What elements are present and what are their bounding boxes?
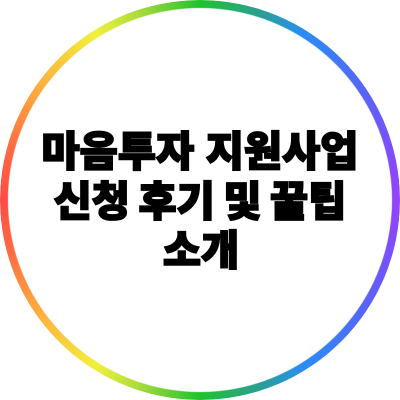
title: 마음투자 지원사업	[42, 128, 358, 175]
title: 소개	[163, 227, 239, 274]
title	[42, 128, 358, 274]
title: 신청 후기 및 꿀팁	[54, 178, 346, 225]
